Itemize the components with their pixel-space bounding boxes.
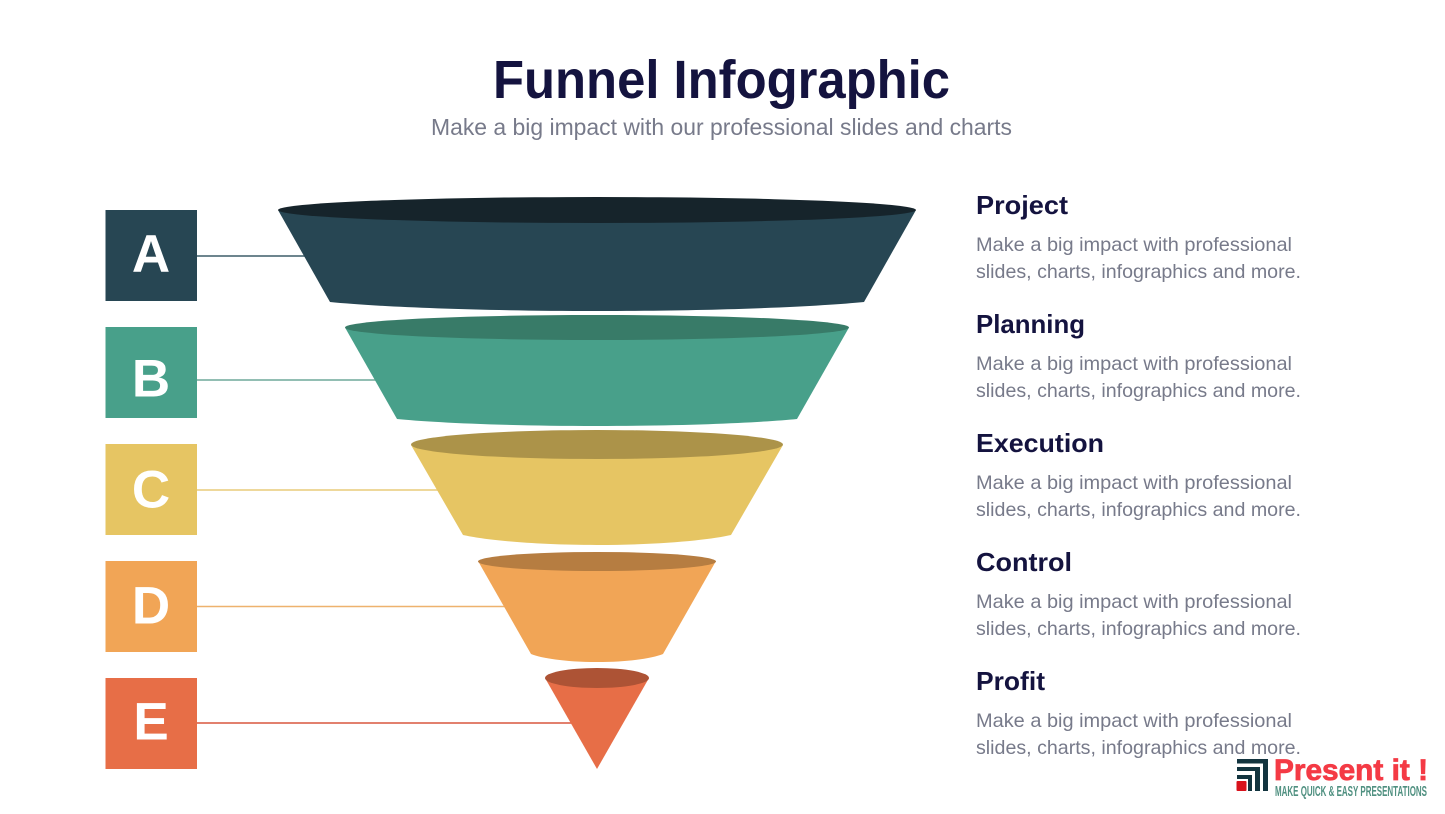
- icon: logo mark: [1236, 759, 1268, 791]
- badge E: [106, 678, 197, 769]
- connector lines: [197, 256, 574, 723]
- badge A: A: [132, 225, 170, 284]
- badge D: D: [132, 576, 170, 636]
- funnel segment B: [345, 315, 849, 426]
- funnel segment C: [411, 430, 783, 545]
- badge C: C: [132, 460, 170, 520]
- text block: Planning: Make a big impact with professional: [976, 353, 1292, 375]
- text block: Profit: slides, charts, infographics and more.: [976, 737, 1301, 759]
- badge A: [106, 210, 197, 301]
- text block: Project: slides, charts, infographics and more.: [976, 261, 1301, 283]
- text block: Project: [976, 190, 1301, 283]
- text block: Control: slides, charts, infographics and more.: [976, 618, 1301, 640]
- text block: Execution: Make a big impact with professional: [976, 472, 1292, 494]
- funnel segment A: [278, 197, 916, 311]
- text block: Control: Make a big impact with professional: [976, 591, 1292, 613]
- text block: Planning: Planning: [976, 309, 1085, 339]
- text block: Project: Make a big impact with professional: [976, 234, 1292, 256]
- badge D: [106, 561, 197, 652]
- text block: Project: Project: [976, 190, 1068, 220]
- title: Funnel Infographic: [493, 50, 950, 110]
- funnel segment E: [545, 668, 649, 769]
- text block: Execution: slides, charts, infographics and more.: [976, 499, 1301, 521]
- text block: Profit: Make a big impact with professional: [976, 710, 1292, 732]
- text block: Planning: slides, charts, infographics and more.: [976, 380, 1301, 402]
- badge B: B: [132, 350, 170, 408]
- text block: Profit: [976, 666, 1301, 759]
- text block: Control: [976, 547, 1301, 640]
- funnel segment D: [478, 552, 716, 662]
- subtitle: Make a big impact with our professional slides and charts: [431, 114, 1012, 140]
- badge B: [106, 327, 197, 418]
- text block: Execution: [976, 428, 1301, 521]
- text block: Planning: [976, 309, 1301, 402]
- text block: Profit: Profit: [976, 666, 1045, 696]
- badge C: [106, 444, 197, 535]
- badge E: E: [133, 692, 169, 752]
- text block: Control: Control: [976, 547, 1072, 577]
- logo: Present it: [1236, 754, 1428, 800]
- logo: Present it: Present it !: [1274, 754, 1428, 787]
- text block: Execution: Execution: [976, 428, 1104, 458]
